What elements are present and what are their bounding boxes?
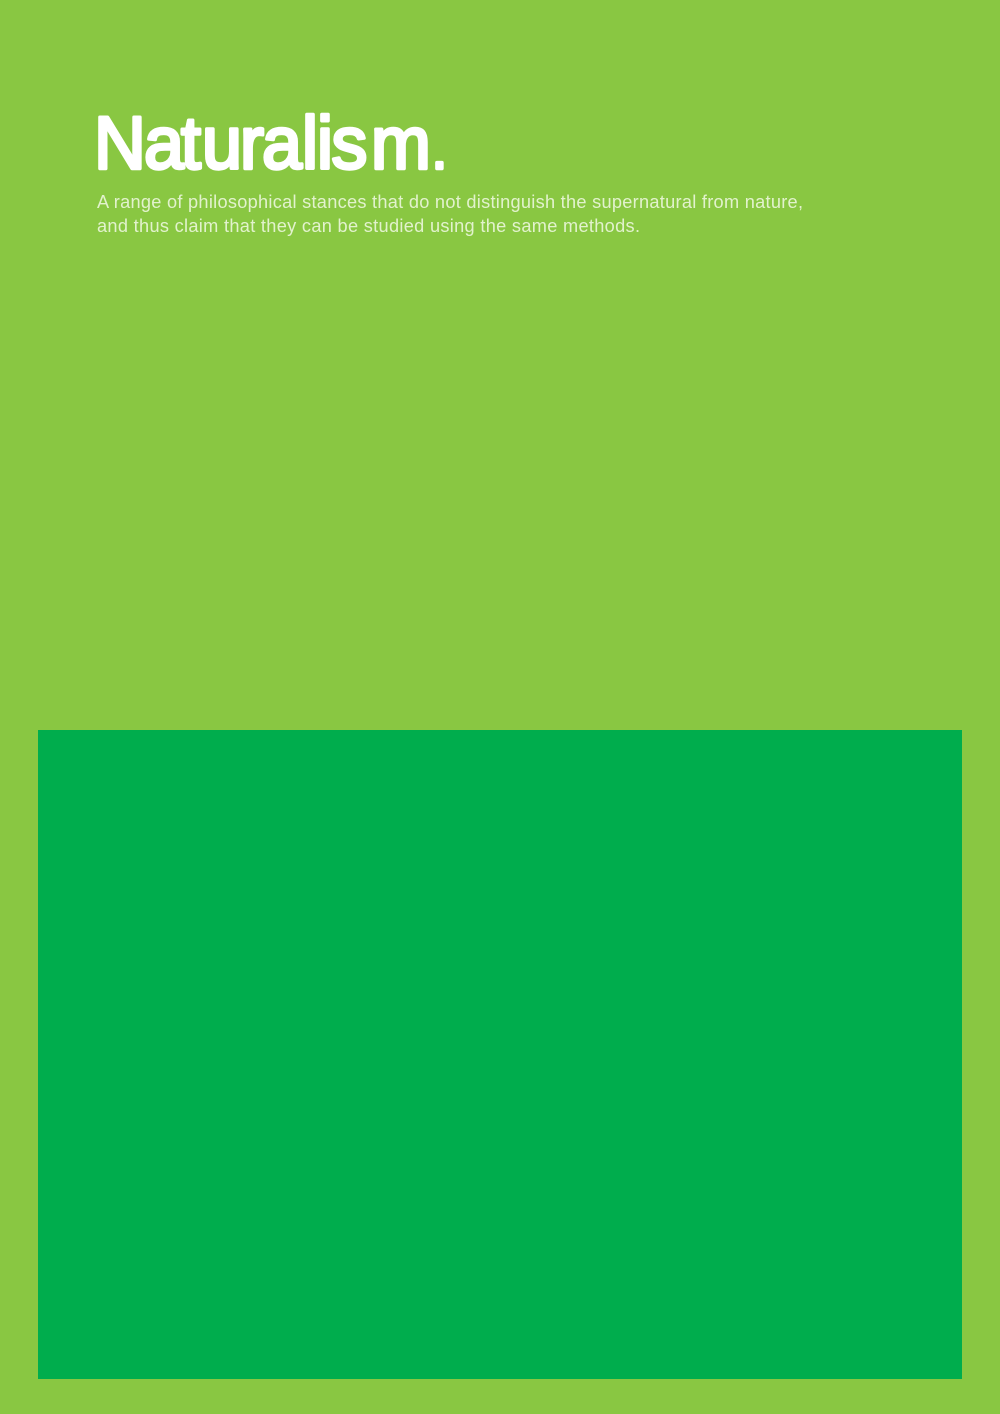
description text [97,192,803,236]
description text: A range of philosophical stances that do not distinguish the supernatural from nature, [97,192,803,212]
large green rectangle [38,730,962,1379]
description text: and thus claim that they can be studied using the same methods. [97,216,640,236]
title: . [432,118,447,181]
title: Naturalism [94,103,431,185]
